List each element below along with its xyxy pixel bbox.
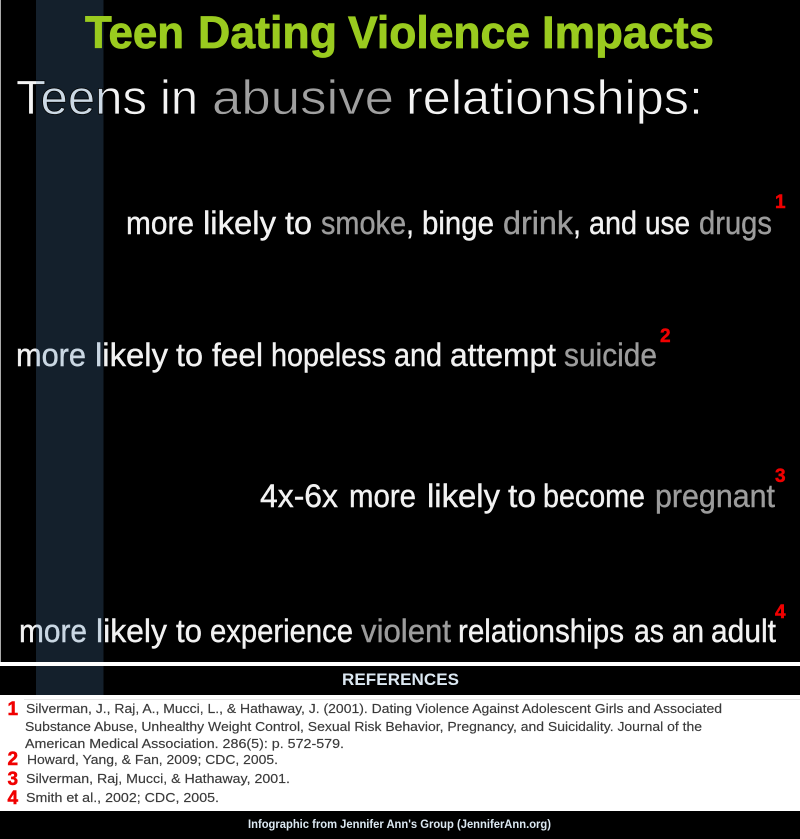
statement 4: likely <box>96 613 167 649</box>
statement 1: to <box>285 205 312 241</box>
reference 1 <box>8 699 722 751</box>
statement 2: likely <box>95 337 168 373</box>
reference marker 1: 1 <box>775 192 786 213</box>
reference 4 <box>8 788 219 809</box>
statement 4: adult <box>711 613 776 649</box>
title: Teen <box>85 7 184 58</box>
references heading: REFERENCES <box>342 670 459 689</box>
statement 3: pregnant <box>655 478 775 514</box>
reference 4: 4 <box>8 788 18 809</box>
reference 2: Howard, Yang, & Fan, 2009; CDC, 2005. <box>27 753 278 767</box>
title: Dating <box>198 7 337 58</box>
reference 4: Smith et al., 2002; CDC, 2005. <box>26 791 219 805</box>
statement 3 <box>260 466 786 514</box>
heading: teens in abusive relationships: relationships: <box>406 72 703 125</box>
statement 4 <box>19 602 786 649</box>
statement 1: , <box>406 205 414 241</box>
statement 1: use <box>645 205 690 241</box>
statement 1: , <box>573 205 581 241</box>
reference marker 3: 3 <box>775 466 786 487</box>
heading: teens in abusive relationships: abusive <box>212 72 394 125</box>
statement 2: suicide <box>564 337 657 373</box>
statement 1: drink <box>503 205 574 241</box>
statement 4: more <box>19 613 87 649</box>
heading: teens in abusive relationships <box>16 72 703 125</box>
statement 1: smoke <box>321 205 406 241</box>
heading: teens in abusive relationships: in <box>160 72 198 125</box>
statement 4: violent <box>361 613 451 649</box>
statement 2: hopeless <box>271 337 386 373</box>
statement 3: 4x-6x <box>260 478 338 514</box>
statement 4: experience <box>210 613 353 649</box>
statement 3: likely <box>427 478 500 514</box>
reference 3 <box>8 769 290 790</box>
statement 1: binge <box>422 205 494 241</box>
statement 3: more <box>349 478 416 514</box>
footer credit: Infographic from Jennifer Ann's Group (JenniferAnn.org) <box>248 819 551 831</box>
statement 2: attempt <box>450 337 556 373</box>
statement 1 <box>126 192 786 241</box>
statement 2: more <box>16 337 86 373</box>
references panel <box>0 695 800 811</box>
heading: teens in abusive relationships: Teens <box>16 72 147 125</box>
statement 2 <box>16 326 671 373</box>
title: Violence <box>348 7 530 58</box>
statement 4: relationships <box>458 613 624 649</box>
reference 1: Substance Abuse, Unhealthy Weight Control, Sexual Risk Behavior, Pregnancy, and Suicidality. Journal of the <box>25 720 702 734</box>
statement 4: to <box>176 613 202 649</box>
reference marker 4: 4 <box>775 602 786 623</box>
statement 2: to <box>176 337 203 373</box>
statement 1: and <box>589 205 637 241</box>
reference 3: Silverman, Raj, Mucci, & Hathaway, 2001. <box>26 772 290 786</box>
reference marker 2: 2 <box>660 326 671 347</box>
reference 3: 3 <box>8 769 18 790</box>
reference 1: 1 <box>8 699 18 720</box>
statement 2: feel <box>212 337 263 373</box>
title: Impacts <box>542 7 714 58</box>
reference 2 <box>8 749 278 770</box>
title <box>85 7 714 58</box>
statement 1: likely <box>203 205 276 241</box>
reference 2: 2 <box>8 749 18 770</box>
statement 3: become <box>543 478 645 514</box>
statement 2: and <box>394 337 442 373</box>
statement 4: an <box>672 613 704 649</box>
statement 4: as <box>634 613 664 649</box>
statement 1: more <box>126 205 194 241</box>
statement 1: drugs <box>699 205 772 241</box>
vertical blue band <box>36 0 104 695</box>
reference 1: American Medical Association. 286(5): p. 572-579. <box>25 737 344 751</box>
statement 3: to <box>508 478 536 514</box>
reference 1: Silverman, J., Raj, A., Mucci, L., & Hathaway, J. (2001). Dating Violence Against Adolescent Girls and Associated <box>26 702 722 716</box>
